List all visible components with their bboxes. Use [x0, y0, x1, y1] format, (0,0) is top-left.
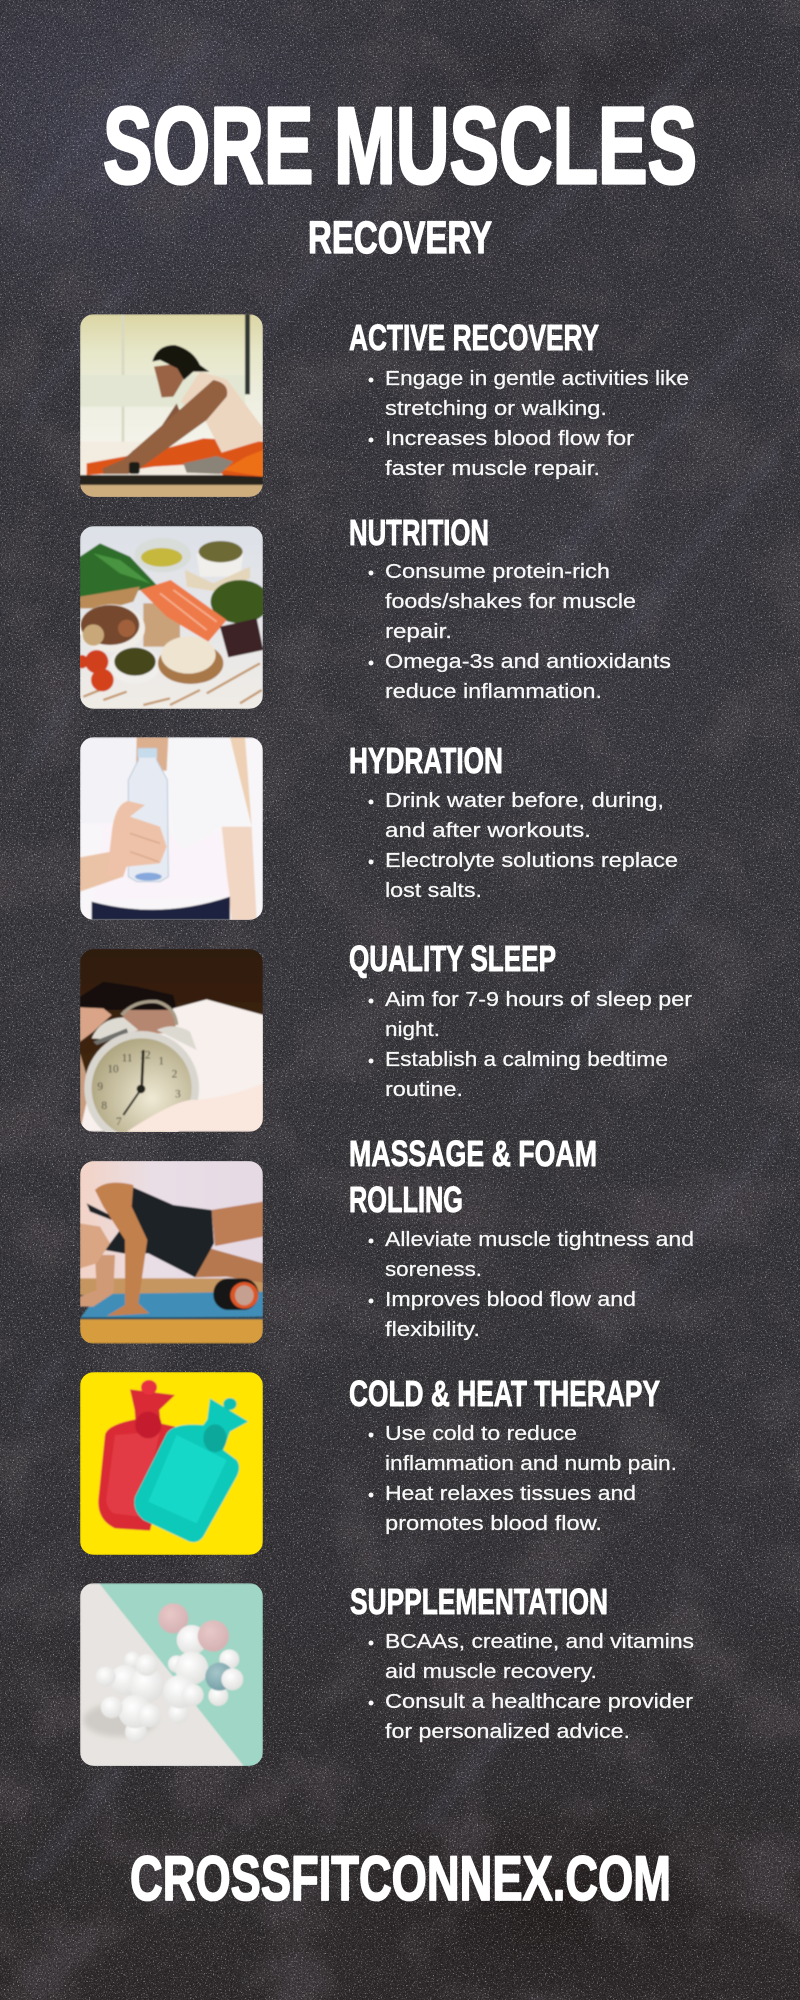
bullet list: flexibility.	[385, 1319, 480, 1341]
bullet list	[368, 790, 678, 902]
bullet list: stretching or walking.	[385, 398, 607, 420]
photo: molecule model	[80, 1583, 263, 1766]
bullet list: Heat relaxes tissues and	[385, 1483, 636, 1505]
bullet list: repair.	[385, 621, 452, 643]
bullet list: BCAAs, creatine, and vitamins	[385, 1631, 694, 1653]
bullet list: Drink water before, during,	[385, 790, 664, 812]
bullet list: Increases blood flow for	[385, 428, 634, 450]
heading line 2: ROLLING	[349, 1179, 463, 1220]
bullet list: inflammation and numb pain.	[385, 1453, 677, 1475]
panel: quality sleep	[80, 945, 692, 1132]
bullet list: foods/shakes for muscle	[385, 591, 636, 613]
panel: active recovery	[80, 314, 689, 497]
bullet list: Use cold to reduce	[385, 1423, 577, 1445]
photo: alarm clock in bed: 3	[175, 1089, 181, 1101]
bullet list: Improves blood flow and	[385, 1289, 636, 1311]
photo: alarm clock in bed: 10	[107, 1064, 119, 1076]
bullet list: routine.	[385, 1079, 463, 1101]
panel: cold and heat therapy	[80, 1372, 677, 1555]
panel: hydration	[80, 737, 678, 920]
photo: water bottle	[80, 737, 263, 920]
bullet list: Electrolyte solutions replace	[385, 850, 678, 872]
bullet list	[368, 1631, 694, 1743]
panel: supplementation	[80, 1581, 694, 1766]
photo: alarm clock in bed: 9	[97, 1081, 103, 1093]
bullet list	[368, 989, 692, 1101]
bullet list: and after workouts.	[385, 820, 591, 842]
photo: alarm clock in bed: 2	[172, 1069, 178, 1081]
bullet list: soreness.	[385, 1259, 482, 1281]
bullet list: Omega-3s and antioxidants	[385, 651, 671, 673]
bullet list: aid muscle recovery.	[385, 1661, 597, 1683]
subtitle: RECOVERY	[308, 212, 492, 263]
photo: woman stretching	[80, 314, 263, 497]
photo: healthy food	[75, 526, 269, 709]
bullet list: for personalized advice.	[385, 1721, 630, 1743]
bullet list: Consult a healthcare provider	[385, 1691, 693, 1713]
photo: alarm clock in bed: 8	[101, 1100, 107, 1112]
heading: MASSAGE & FOAM	[349, 1133, 597, 1174]
heading: SUPPLEMENTATION	[350, 1581, 608, 1622]
photo: alarm clock in bed: 11	[122, 1053, 133, 1065]
photo: alarm clock in bed: 1	[158, 1055, 164, 1067]
bullet list: faster muscle repair.	[385, 458, 600, 480]
bullet list	[368, 1423, 677, 1535]
bullet list: lost salts.	[385, 880, 482, 902]
photo: foam rolling	[80, 1161, 263, 1343]
bullet list	[368, 561, 671, 703]
bullet list: night.	[385, 1019, 440, 1041]
bullet list: Engage in gentle activities like	[385, 368, 689, 390]
bullet list: reduce inflammation.	[385, 681, 602, 703]
photo: alarm clock in bed: 12	[139, 1049, 151, 1061]
panel: nutrition	[75, 512, 671, 709]
photo: hot water bottles	[80, 1372, 263, 1555]
bullet list: Aim for 7-9 hours of sleep per	[385, 989, 692, 1011]
bullet list: Consume protein-rich	[385, 561, 610, 583]
heading: QUALITY SLEEP	[349, 938, 556, 979]
panel: massage and foam rolling	[80, 1133, 694, 1343]
heading: COLD & HEAT THERAPY	[349, 1373, 660, 1414]
bullet list	[368, 368, 689, 480]
photo: alarm clock in bed	[80, 949, 263, 1146]
bullet list: Alleviate muscle tightness and	[385, 1229, 694, 1251]
bullet list: promotes blood flow.	[385, 1513, 602, 1535]
bullet list	[368, 1229, 694, 1341]
photo: alarm clock in bed: 7	[116, 1116, 122, 1128]
heading: ACTIVE RECOVERY	[349, 317, 599, 358]
heading: NUTRITION	[349, 512, 489, 553]
bullet list: Establish a calming bedtime	[385, 1049, 668, 1071]
heading: HYDRATION	[349, 740, 503, 781]
